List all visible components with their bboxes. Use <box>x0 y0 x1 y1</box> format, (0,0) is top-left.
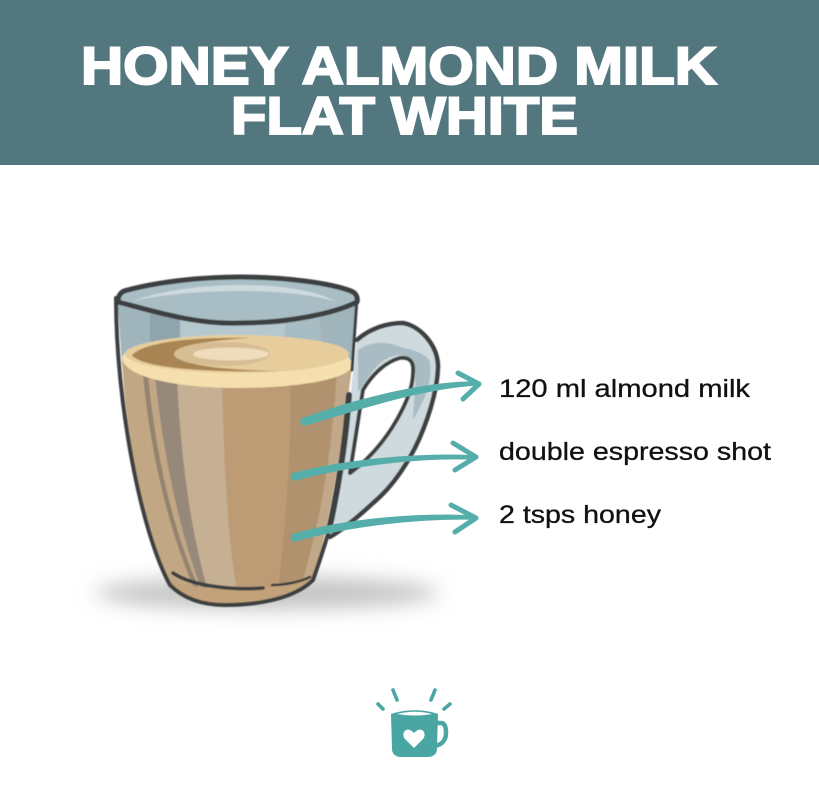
label: espresso: double espresso shot <box>499 438 771 466</box>
title: FLAT WHITE <box>231 87 578 146</box>
mug outline <box>116 277 357 605</box>
ingredient labels <box>499 375 771 529</box>
arrows <box>291 373 479 541</box>
title <box>81 37 717 146</box>
glass upper part <box>117 277 357 370</box>
rim interior <box>118 277 357 323</box>
label: honey: 2 tsps honey <box>499 501 662 529</box>
mug handle <box>330 323 438 537</box>
logo rays <box>378 690 450 709</box>
illustration: coffee mug <box>110 277 438 610</box>
mug shadow <box>95 577 439 609</box>
coffee body <box>122 360 352 604</box>
foam layer <box>122 335 353 388</box>
arrow: 2 tsps honey <box>291 505 476 541</box>
label: almond milk: 120 ml almond milk <box>499 375 751 403</box>
arrow: double espresso shot <box>291 443 476 480</box>
logo: teal mug with heart <box>378 690 450 757</box>
arrow: 120 ml almond milk <box>301 373 479 425</box>
header banner <box>0 0 819 165</box>
title: HONEY ALMOND MILK <box>81 37 717 96</box>
